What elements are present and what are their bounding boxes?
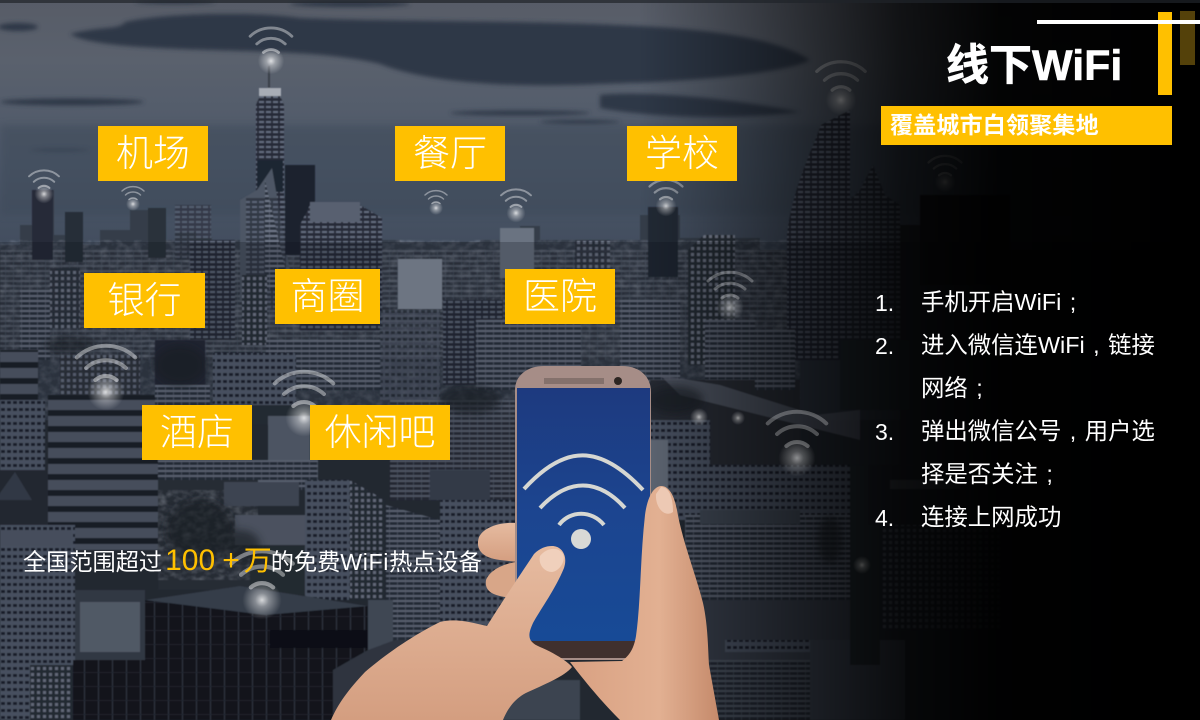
steps list: 1. [875, 290, 894, 316]
distant skyline [0, 190, 1000, 420]
steps list: 4. [875, 505, 894, 531]
foreground buildings [0, 340, 1000, 720]
step 4: 连接上网成功 [921, 504, 1061, 530]
accent bar: yellow [1158, 12, 1172, 95]
landmark tower with spire [213, 66, 515, 500]
tag: hospital [505, 269, 615, 324]
tag: bank: 银行 [108, 280, 182, 321]
step 1: ; [1070, 289, 1076, 315]
tag: shopping district: 商圈 [290, 276, 364, 317]
step 2 continued: ; [976, 375, 983, 401]
hotspot count statement: 全国范围超过100+万的免费WiFi热点设备 [23, 544, 482, 577]
hands holding phone [331, 486, 719, 720]
step 2: 进入微信连WiFi 链接 [921, 332, 1155, 358]
step 3 continued: 择是否关注 [921, 461, 1038, 487]
smartphone [515, 366, 651, 660]
tag: restaurant: 餐厅 [413, 133, 487, 174]
subtitle banner [881, 106, 1172, 145]
tag: school: 学校 [645, 133, 719, 174]
tag: hotel [142, 405, 252, 460]
step 1 [875, 289, 1076, 316]
subtitle banner: 覆盖城市白领聚集地 [890, 112, 1099, 138]
street lights [690, 408, 871, 574]
step 1: 手机开启WiFi [921, 289, 1061, 315]
title: 线下WiFi [946, 42, 1122, 90]
overall city darkening [0, 242, 1200, 720]
tag: hotel: 酒店 [160, 412, 234, 453]
tag: school [627, 126, 737, 181]
steps list [875, 289, 1155, 531]
top dark edge [0, 0, 1200, 3]
right-side darkening gradient [640, 0, 1200, 720]
tag: shopping district [275, 269, 380, 324]
step 2: , [1093, 332, 1100, 358]
tag: airport [98, 126, 208, 181]
wifi signal icons over the city [29, 28, 962, 620]
phone wifi symbol [524, 455, 643, 549]
dark tree clusters [44, 338, 842, 564]
accent bar: dim [1180, 11, 1195, 65]
step 3 continued: ; [1046, 461, 1053, 487]
tag: hospital: 医院 [523, 276, 597, 317]
steps list: 3. [875, 419, 894, 445]
steps list: 2. [875, 333, 894, 359]
tag: leisure bar: 休闲吧 [324, 412, 436, 453]
tag: restaurant [395, 126, 505, 181]
right skyscrapers [650, 110, 1010, 470]
ground base under the city [0, 250, 1200, 720]
sky with clouds [0, 0, 1200, 300]
hand behind phone: fingers [478, 523, 518, 598]
step 3: , [1070, 418, 1076, 444]
wifi signal icons on the right city [708, 272, 826, 477]
tag: leisure bar [310, 405, 450, 460]
step 3: 弹出微信公号 用户选 [921, 418, 1155, 444]
tag: airport: 机场 [116, 133, 190, 174]
step 2 continued: 网络 [921, 375, 968, 401]
tag: bank [84, 273, 205, 328]
top white line [1037, 20, 1200, 24]
